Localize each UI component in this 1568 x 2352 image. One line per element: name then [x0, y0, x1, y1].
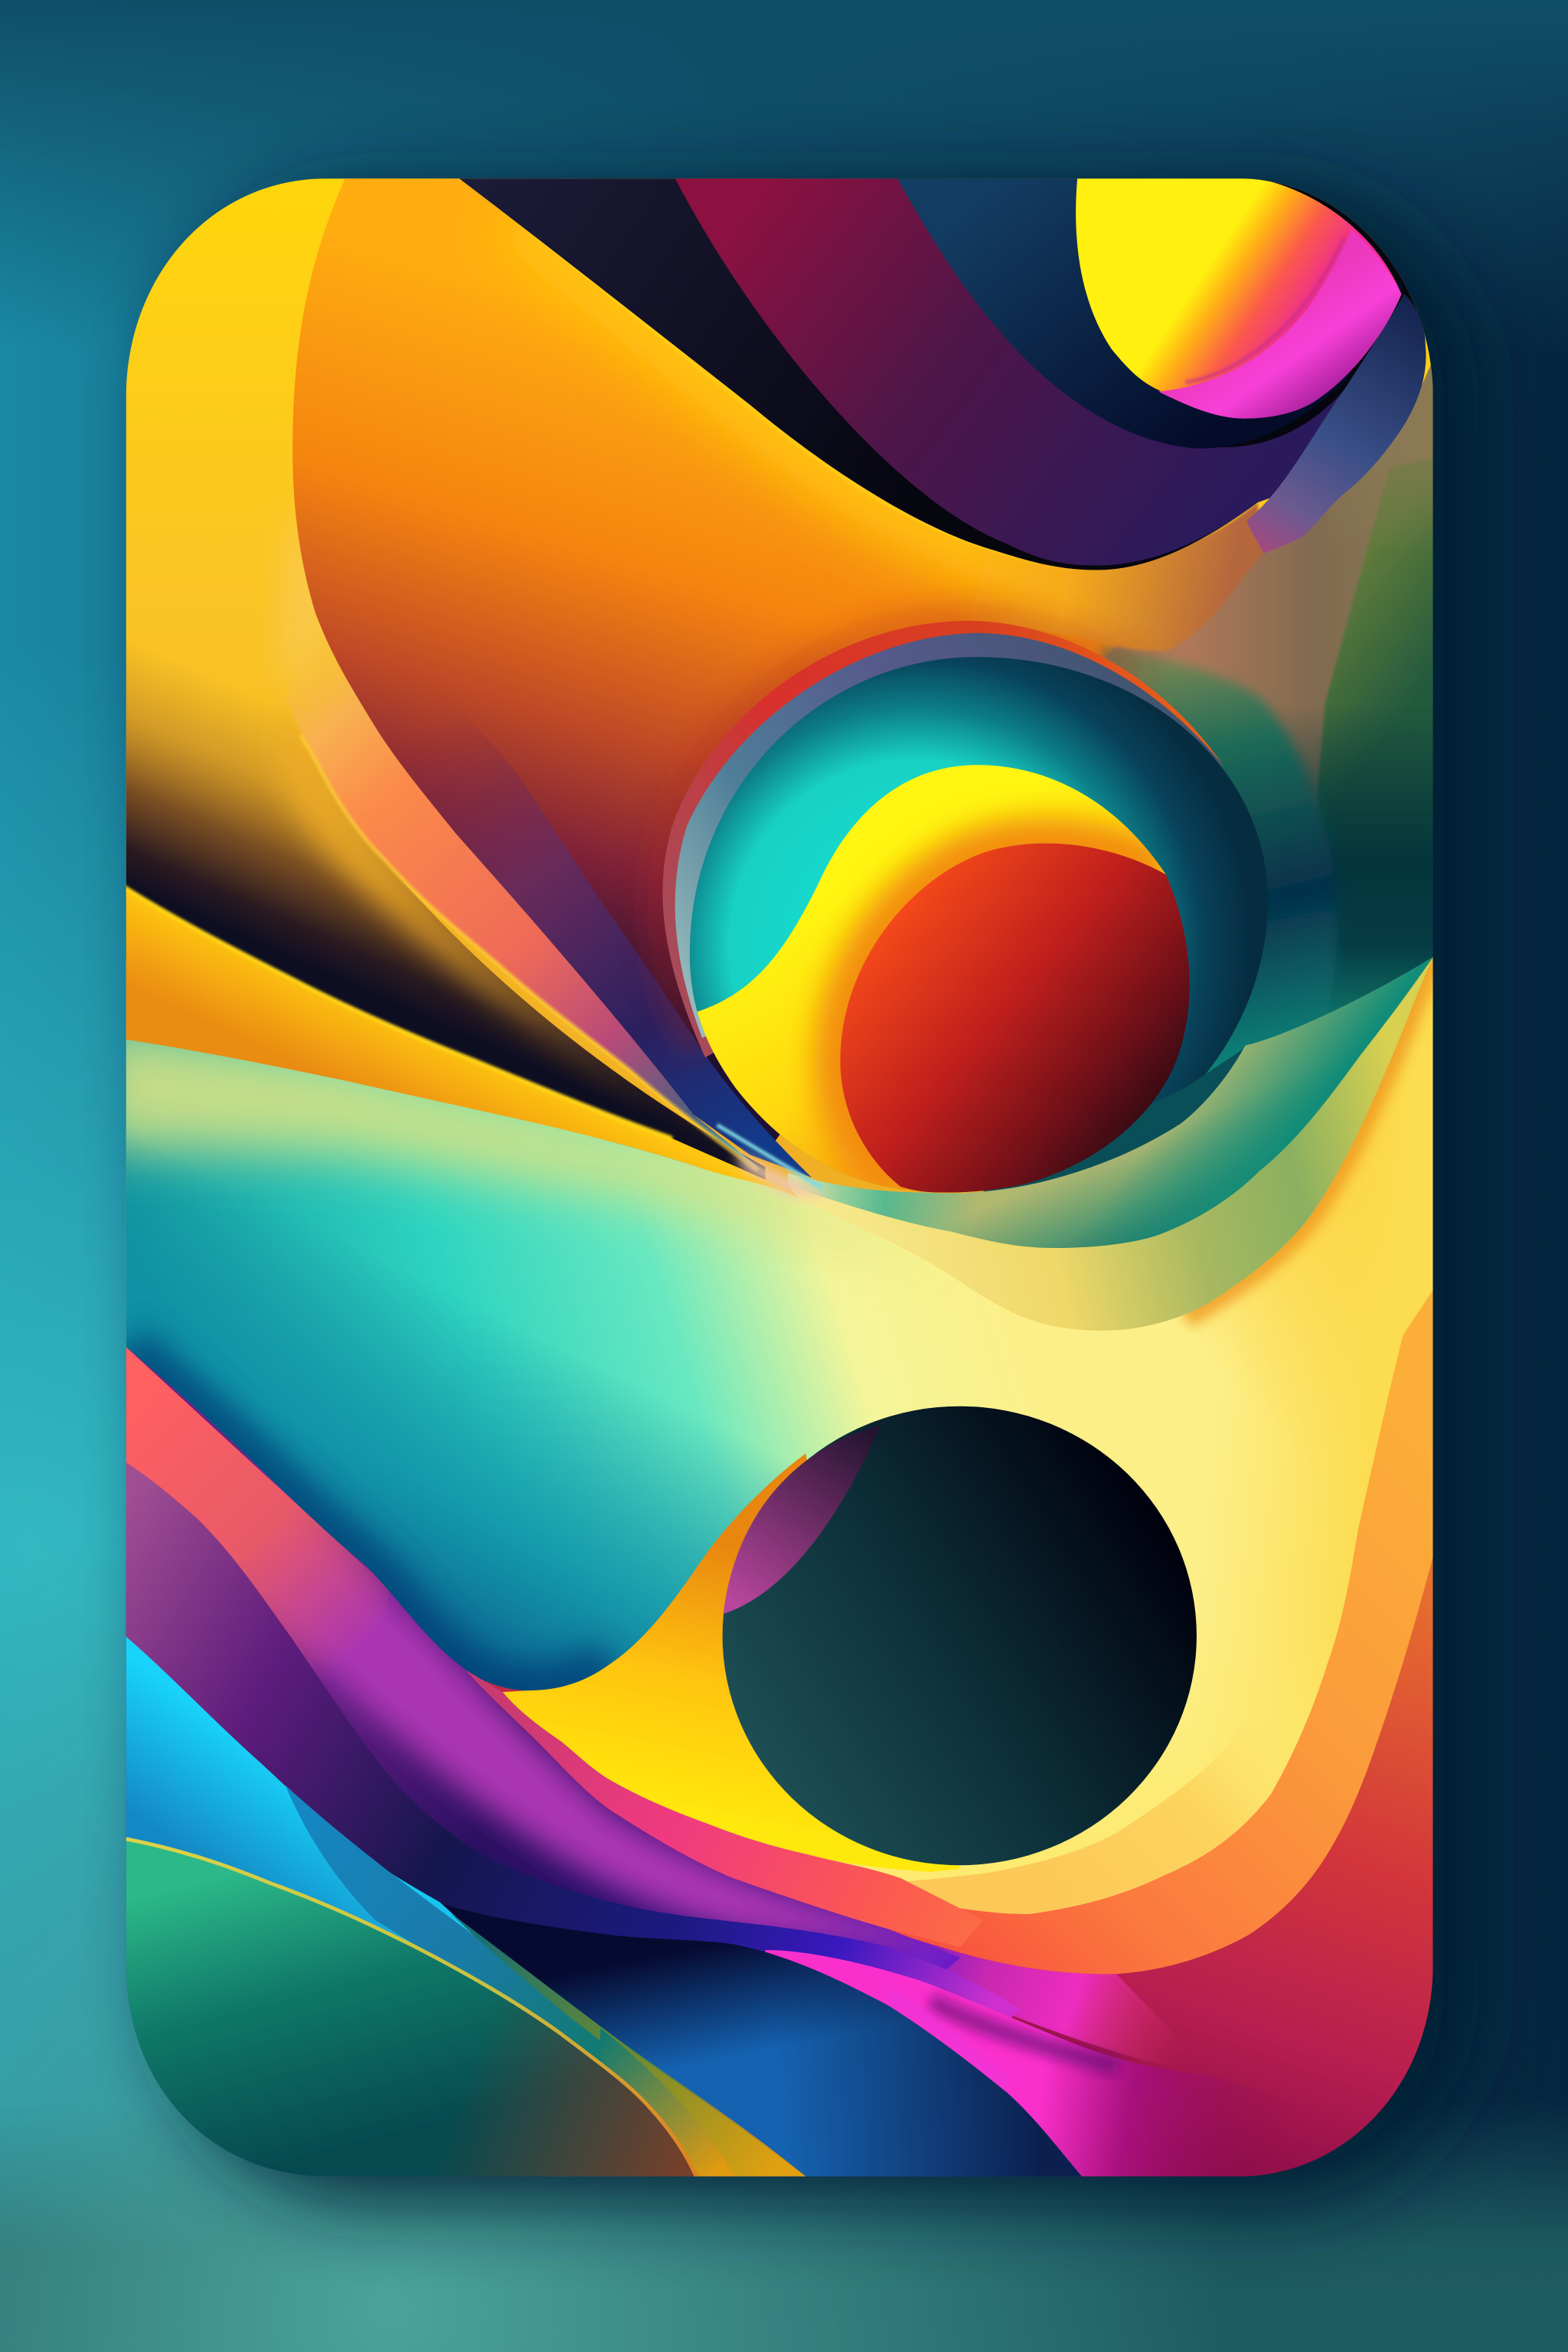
- blue ribbon: [405, 1902, 1082, 2190]
- coral ribbon top: [126, 1347, 390, 1740]
- tan orange flow: [960, 502, 1263, 651]
- lower pale yellow overlay: [810, 1620, 1351, 1950]
- red halo: [661, 621, 1140, 1050]
- inner olive band: [788, 957, 1433, 1331]
- magenta edge glow: [885, 1992, 1007, 2085]
- pink sun crescent: [1158, 230, 1401, 419]
- light yellow glow above salmon: [279, 495, 338, 697]
- orange ball shadow: [840, 843, 1166, 1187]
- gold fan glow: [277, 727, 626, 1087]
- panel: yellow base: [126, 178, 1433, 1528]
- wave blue body: [126, 1035, 1086, 1710]
- purple ribbon: [126, 1347, 960, 2010]
- dark hole: [723, 1406, 1197, 1865]
- green wedge: [1305, 450, 1463, 960]
- pale junction: [735, 1152, 833, 1197]
- right gold overlay: [1050, 960, 1440, 2010]
- yellow edge glow: [510, 217, 1140, 597]
- purple ribbon two: [126, 1462, 1021, 2047]
- right panel: [1050, 360, 1463, 1140]
- upper magenta band: [705, 1860, 1215, 2076]
- green wedge top fade: [1328, 397, 1440, 555]
- yellow fan edge: [300, 735, 758, 1170]
- purple wedge: [724, 1425, 880, 1614]
- tan panel: [1050, 360, 1433, 1140]
- saturated yellow under hole: [503, 1453, 960, 1872]
- lower teal shading: [1050, 705, 1433, 1140]
- lower base: [126, 1500, 1433, 2177]
- gold stripe: [600, 2028, 735, 2177]
- teal lower shading: [126, 1347, 611, 1690]
- main teal yellow wave: [126, 957, 1433, 1914]
- purple ribbon highlight: [240, 1470, 960, 1950]
- orange shadow under band: [1185, 957, 1433, 1317]
- orange shape: [292, 178, 1116, 1141]
- circle ring: [690, 657, 1268, 1193]
- yellow wedge: [123, 887, 812, 1209]
- card shadow: [165, 188, 1478, 2205]
- dark fan: [126, 655, 766, 1179]
- ring lower filler: [975, 1043, 1253, 1195]
- pink stripes: [455, 1664, 983, 1947]
- circle red rim: [662, 621, 1223, 1057]
- wave olive top: [90, 1020, 930, 1260]
- green wave band: [788, 957, 1433, 1248]
- orange band: [600, 1170, 1433, 1974]
- red orb: [840, 843, 1190, 1194]
- circle grey rim: [675, 633, 1223, 1038]
- gold band under hole: [840, 1635, 1351, 1950]
- sun shape: [1076, 178, 1401, 419]
- sun crease: [1185, 237, 1344, 383]
- teal stripe: [285, 1785, 805, 2177]
- cyan junction streak: [717, 1125, 822, 1188]
- green hill: [126, 1839, 696, 2177]
- teal hood: [1050, 645, 1338, 1140]
- wedge bright edge: [123, 887, 672, 1138]
- cyan ribbon: [126, 1636, 705, 2177]
- slate strip: [1247, 294, 1426, 554]
- lower magenta ribbon: [766, 1950, 1433, 2177]
- yellow orb: [694, 765, 1166, 1200]
- right yellow overlay: [1050, 945, 1440, 1995]
- dark top wedge: [459, 178, 1433, 570]
- card: [90, 178, 1463, 2190]
- navy feather: [369, 678, 812, 1178]
- navy swoosh: [897, 178, 1403, 449]
- salmon fan: [285, 612, 766, 1173]
- dark purple streak: [930, 2001, 1118, 2067]
- burgundy swoosh: [675, 178, 1351, 566]
- olive stripe: [450, 1913, 805, 2177]
